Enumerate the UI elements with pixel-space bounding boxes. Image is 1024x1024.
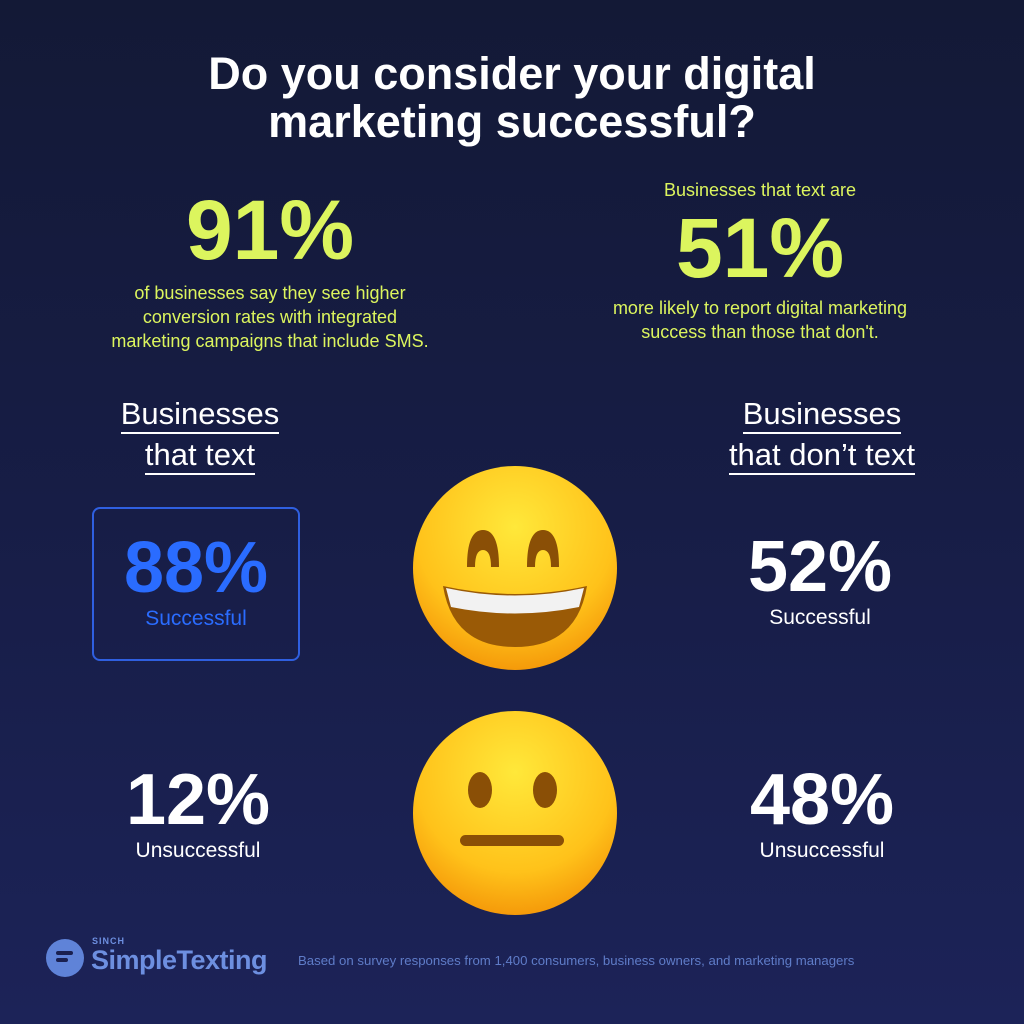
stat: 91%: 91% (186, 183, 354, 277)
logo: SimpleTexting: SINCH (92, 936, 125, 946)
stat: 52% successful: 52% (748, 527, 892, 607)
heading: businesses that text: that text (145, 437, 255, 472)
icon: grinning emoji (413, 466, 617, 670)
title: Do you consider your digital (208, 48, 816, 99)
stat: 51%: Businesses that text are (664, 180, 856, 200)
icon: neutral emoji (413, 711, 617, 915)
stat: 52% successful: Successful (769, 606, 871, 629)
heading: businesses that don't text (729, 396, 915, 475)
stat: 51% (613, 180, 907, 342)
stat: 12% unsuccessful: 12% (126, 760, 270, 840)
stat: 12% unsuccessful: Unsuccessful (136, 839, 260, 862)
logo: SimpleTexting: SimpleTexting (91, 945, 267, 975)
stat: 48% unsuccessful: Unsuccessful (760, 839, 884, 862)
stat: 51%: 51% (676, 201, 844, 295)
stat: 51%: more likely to report digital marketing (613, 298, 907, 318)
stat: 91% (111, 183, 429, 351)
highlight box: 88% successful (92, 507, 300, 661)
highlight box: 88% successful: 88% (124, 528, 268, 608)
stat: 91%: conversion rates with integrated (143, 307, 397, 327)
title: marketing successful? (268, 96, 756, 147)
footnote: Based on survey responses from 1,400 consumers, business owners, and marketing managers (298, 953, 854, 968)
stat: 51%: success than those that don't. (641, 322, 879, 342)
stat: 91%: of businesses say they see higher (134, 283, 406, 303)
heading: businesses that text (121, 396, 279, 475)
stat: 48% unsuccessful: 48% (750, 760, 894, 840)
logo: SimpleTexting (46, 936, 267, 977)
heading: businesses that don't text: Businesses (743, 396, 901, 431)
heading: businesses that don't text: that don’t text (729, 437, 915, 472)
stat: 91%: marketing campaigns that include SMS. (111, 331, 429, 351)
highlight box: 88% successful: Successful (145, 607, 247, 630)
title (208, 48, 816, 147)
heading: businesses that text: Businesses (121, 396, 279, 431)
